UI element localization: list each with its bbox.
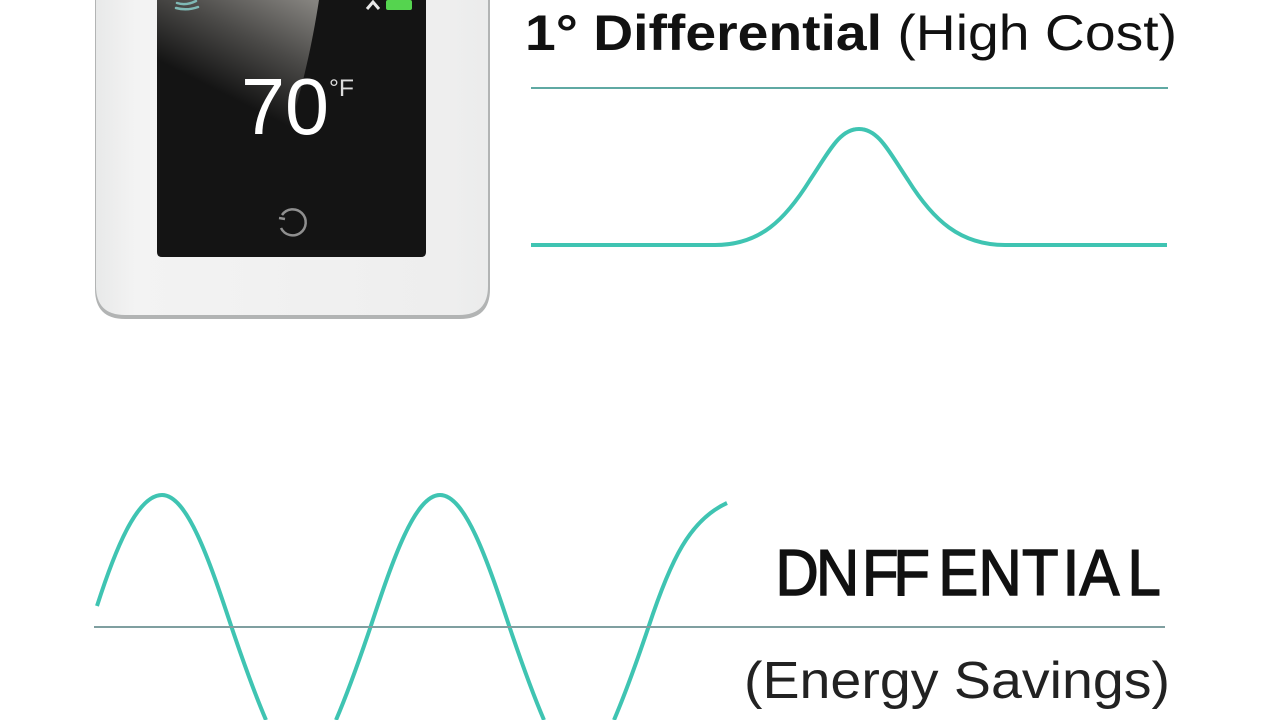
chart: sine wave (97, 495, 727, 720)
heading: 1 degree differential: 1° Differential (High Cost) (525, 5, 1177, 61)
icon: green status indicator (386, 0, 412, 10)
thermostat casing (95, 0, 490, 319)
heading: differential: DNFFENTIAL (776, 537, 1161, 610)
chart: single bell curve (531, 129, 1167, 245)
temperature unit: °F (329, 75, 354, 102)
icon: fan status (176, 1, 198, 9)
screen glare (157, 0, 319, 130)
icon: home button (279, 209, 306, 235)
icon: signal status (367, 2, 379, 9)
temperature reading: 70 (241, 62, 329, 151)
icon: thermostat device (95, 0, 490, 319)
thermostat screen (157, 0, 426, 257)
top divider line (531, 87, 1168, 89)
bottom axis line (94, 626, 1165, 628)
subheading: energy savings: (Energy Savings) (744, 652, 1170, 710)
